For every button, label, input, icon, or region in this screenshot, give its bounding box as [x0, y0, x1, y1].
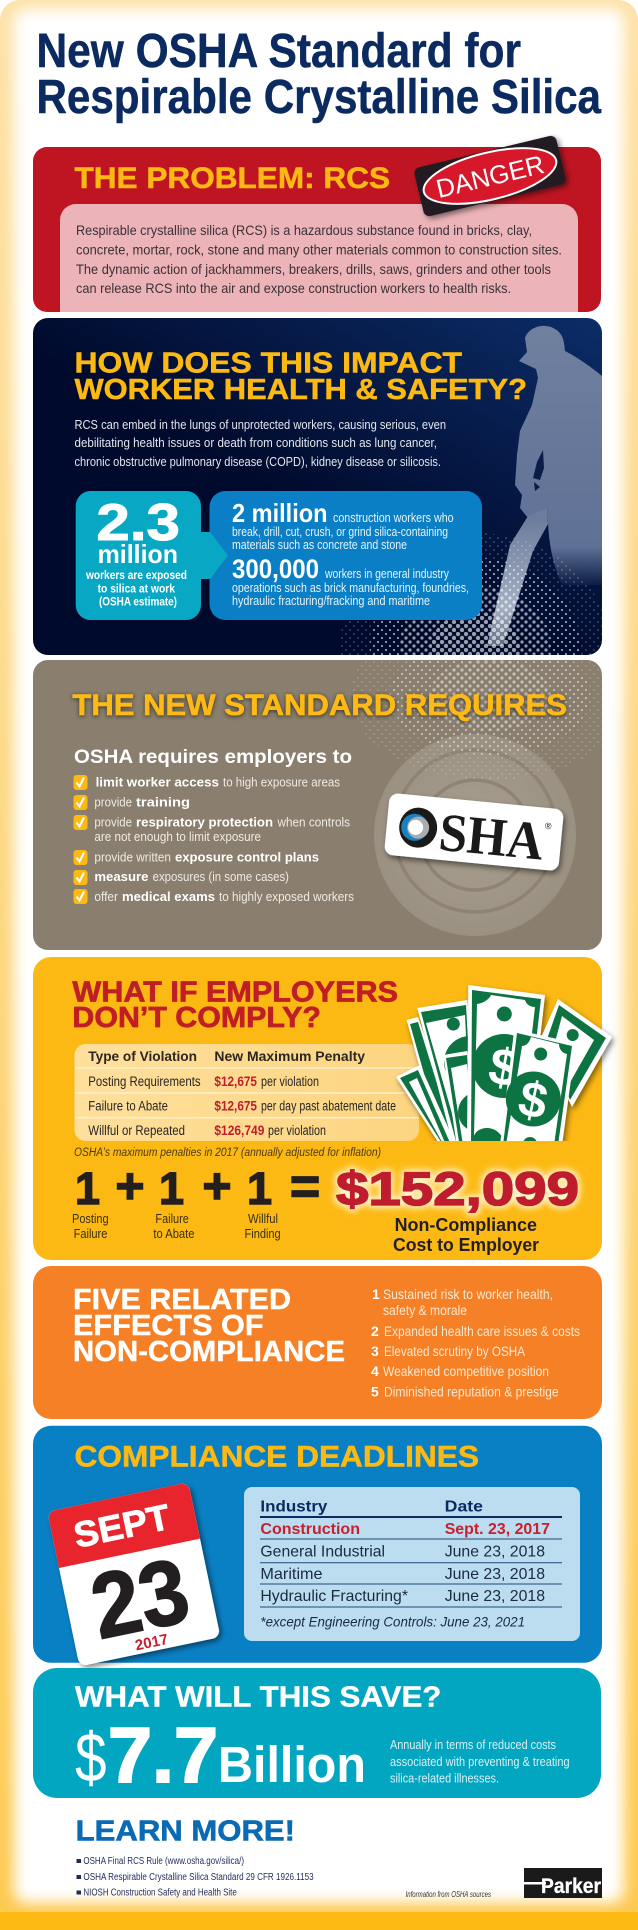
item: respiratory protection — [74, 815, 350, 844]
text block: health effects: chronic obstructive pulmonary disease (COPD), kidney disease or silicosis. — [74, 454, 441, 469]
icon: dollar bills — [396, 985, 612, 1151]
resource links: OSHA Final RCS Rule (www.osha.gov/silica/) — [83, 1856, 244, 1867]
table: penalties: Type of Violation — [88, 1049, 197, 1064]
text block: health effects: RCS can embed in the lungs of unprotected workers, causing serious, even — [74, 417, 446, 432]
numbered list: Sustained risk to worker health, — [383, 1286, 553, 1302]
halftone dots — [341, 534, 602, 655]
text block: savings description — [390, 1738, 570, 1786]
stat box: 2 million construction and 300,000 general industry: hydraulic fracturing/fracking and maritime — [232, 594, 430, 608]
table: penalties: per violation — [261, 1074, 319, 1089]
big figure: $7.7 billion: Billion — [218, 1736, 366, 1793]
panel: what will this save — [33, 1668, 601, 1799]
table: penalties — [74, 1044, 419, 1141]
stat box: 2.3 million workers: 2.3 — [96, 494, 180, 552]
equation labels: Posting — [72, 1211, 109, 1226]
item: medical exams — [74, 889, 354, 904]
item: respiratory protection: provide — [94, 816, 132, 830]
item: limit access — [74, 775, 340, 790]
item: respiratory protection: are not enough to limit exposure — [94, 830, 261, 844]
equation: 1 + 1 + 1 =: 1 — [159, 1163, 184, 1214]
item: exposure control plans: provide written — [94, 851, 171, 865]
logo: Parker: Parker — [541, 1875, 601, 1898]
item: training: provide — [94, 796, 132, 810]
item: measure: measure — [94, 870, 148, 884]
table: penalties: $12,675 — [214, 1074, 257, 1089]
icon: dollar bills: $ — [484, 1037, 523, 1099]
big figure: $7.7 billion: 7.7 — [108, 1711, 218, 1799]
icon: danger badge — [413, 135, 567, 217]
item: training: training — [136, 796, 190, 810]
equation: 1 + 1 + 1 =: 1 — [75, 1163, 100, 1214]
equation: 1 + 1 + 1 =: 1 — [247, 1163, 272, 1214]
equation labels: Finding — [244, 1226, 281, 1241]
text box: problem description: Respirable crystalline silica (RCS) is a hazardous substance found in bricks, clay, — [76, 222, 532, 238]
panel: the problem — [33, 135, 601, 312]
equation: 1 + 1 + 1 =: = — [290, 1158, 320, 1216]
item: respiratory protection: when controls — [277, 816, 350, 830]
heading: comply — [72, 977, 398, 1034]
table: penalties: $12,675 — [214, 1099, 257, 1114]
text block: savings description: silica-related illnesses. — [390, 1772, 499, 1786]
item: exposure control plans: exposure control plans — [175, 851, 319, 865]
equation: 1 + 1 + 1 =: + — [202, 1158, 232, 1214]
stat box: 2 million construction and 300,000 general industry: operations such as brick manufacturing, foundries, — [232, 581, 469, 595]
heading: deadlines: COMPLIANCE DEADLINES — [74, 1441, 479, 1474]
heading: impact — [74, 348, 527, 406]
icon: OSHA logo badge: ® — [544, 821, 552, 831]
heading: five effects: NON-COMPLIANCE — [73, 1336, 345, 1368]
table: penalties: $126,749 — [214, 1123, 264, 1138]
item: medical exams: medical exams — [122, 890, 215, 904]
logo: Parker — [524, 1868, 602, 1898]
item: measure — [74, 870, 289, 885]
panel: worker health and safety — [33, 318, 602, 655]
table: penalties: Failure to Abate — [88, 1099, 168, 1114]
table: deadlines: Hydraulic Fracturing* — [260, 1588, 408, 1605]
text block: savings description: Annually in terms of reduced costs — [390, 1738, 556, 1752]
heading: learn more: LEARN MORE! — [76, 1816, 295, 1848]
table: deadlines: June 23, 2018 — [445, 1566, 545, 1583]
text block: health effects: debilitating health issues or death from conditions such as lung cancer, — [74, 435, 437, 450]
numbered list: 4 — [371, 1363, 379, 1379]
table: deadlines: Sept. 23, 2017 — [445, 1521, 550, 1538]
heading: comply: WHAT IF EMPLOYERS — [72, 977, 398, 1009]
stat box: 2 million construction and 300,000 general industry: 300,000 — [232, 554, 319, 584]
panel: compliance deadlines — [33, 1426, 602, 1666]
numbered list: 1 — [372, 1286, 380, 1302]
table: deadlines — [244, 1487, 580, 1641]
numbered list: Diminished reputation & prestige — [384, 1384, 559, 1400]
total penalty: $152,099: $152,099 — [336, 1162, 579, 1215]
numbered list: Weakened competitive position — [383, 1363, 549, 1379]
stat box: 2 million construction and 300,000 general industry — [210, 491, 482, 620]
resource links: OSHA Respirable Crystalline Silica Standard 29 CFR 1926.1153 — [83, 1872, 314, 1883]
text block: savings description: associated with preventing & treating — [390, 1755, 570, 1769]
big figure: $7.7 billion: $ — [75, 1719, 107, 1797]
table: deadlines: June 23, 2018 — [445, 1588, 545, 1605]
caption: cost to employer — [393, 1215, 539, 1255]
stat box: 2 million construction and 300,000 general industry: materials such as concrete and stone — [232, 538, 407, 552]
halftone dots — [350, 660, 602, 778]
table: deadlines: Maritime — [260, 1566, 323, 1583]
panel: the new standard requires — [33, 660, 602, 950]
heading: five effects: FIVE RELATED — [73, 1284, 291, 1316]
text box: problem description: can release RCS into the air and expose construction workers to health risks. — [76, 280, 511, 296]
item: training — [74, 795, 190, 810]
equation: 1 + 1 + 1 =: + — [115, 1158, 145, 1214]
source note: Information from OSHA sources — [406, 1889, 492, 1899]
item: medical exams: offer — [94, 890, 118, 904]
stat box: 2 million construction and 300,000 general industry: workers in general industry — [324, 567, 450, 581]
resource links — [76, 1856, 314, 1899]
table: penalties: New Maximum Penalty — [214, 1049, 366, 1064]
subheading: requirements: OSHA requires employers to — [74, 747, 352, 768]
item: respiratory protection: respiratory protection — [136, 816, 273, 830]
caption: cost to employer: Cost to Employer — [393, 1235, 539, 1255]
stat box: 2.3 million workers: (OSHA estimate) — [99, 595, 177, 609]
table: penalties: per violation — [268, 1123, 326, 1138]
title: New OSHA Standard for — [36, 25, 521, 78]
heading: five effects: EFFECTS OF — [73, 1310, 264, 1342]
icon: disc with rings — [374, 734, 576, 936]
equation labels: Failure — [155, 1211, 189, 1226]
table: deadlines: Construction — [260, 1521, 360, 1538]
item: limit access: limit worker access — [96, 776, 219, 790]
icon: calendar: 2017 — [134, 1631, 170, 1654]
icon: danger badge: DANGER — [433, 149, 547, 204]
heading: savings: WHAT WILL THIS SAVE? — [75, 1682, 441, 1714]
stat box: 2.3 million workers: workers are exposed — [85, 568, 187, 582]
numbered list: 5 — [371, 1384, 379, 1400]
table: deadlines: *except Engineering Controls: June 23, 2021 — [260, 1614, 525, 1630]
panel: what if employers don't comply — [33, 957, 612, 1260]
caption: cost to employer: Non-Compliance — [395, 1215, 537, 1235]
stat box: 2 million construction and 300,000 general industry: construction workers who — [333, 511, 454, 525]
big figure: $7.7 billion — [75, 1711, 366, 1799]
table: deadlines: Date — [445, 1499, 483, 1516]
stat box: 2 million construction and 300,000 general industry: 2 million — [232, 498, 328, 528]
equation labels: to Abate — [153, 1226, 194, 1241]
heading: new standard: THE NEW STANDARD REQUIRES — [72, 689, 567, 722]
text block: health effects — [74, 417, 446, 469]
table: deadlines: General Industrial — [260, 1544, 385, 1561]
resource links: NIOSH Construction Safety and Health Site — [83, 1888, 237, 1899]
stat box: 2.3 million workers: million — [98, 539, 178, 569]
table: deadlines: Industry — [260, 1499, 327, 1516]
equation: 1 + 1 + 1 = — [75, 1158, 320, 1216]
numbered list: 2 — [371, 1323, 379, 1339]
heading: the problem: THE PROBLEM: RCS — [74, 162, 390, 195]
text box: problem description — [60, 204, 578, 312]
item: medical exams: to highly exposed workers — [219, 890, 354, 904]
numbered list — [371, 1286, 580, 1400]
heading: impact: WORKER HEALTH & SAFETY? — [74, 374, 527, 406]
note: penalties footnote: OSHA’s maximum penalties in 2017 (annually adjusted for inflation) — [74, 1147, 381, 1159]
icon: calendar: 23 — [83, 1539, 197, 1659]
stat box: 2.3 million workers: to silica at work — [98, 582, 175, 596]
equation labels: Failure — [74, 1226, 107, 1241]
heading: five effects — [73, 1284, 345, 1368]
heading: comply: DON’T COMPLY? — [72, 1002, 321, 1034]
numbered list: Expanded health care issues & costs — [384, 1323, 580, 1339]
checklist — [74, 775, 354, 904]
item: measure: exposures (in some cases) — [153, 870, 289, 884]
text box: problem description: The dynamic action of jackhammers, breakers, drills, saws, grinders and other tools — [76, 261, 551, 277]
text box: problem description: concrete, mortar, rock, stone and many other materials common to construction sites. — [76, 242, 562, 258]
numbered list: Elevated scrutiny by OSHA — [384, 1343, 526, 1359]
numbered list: safety & morale — [383, 1302, 467, 1318]
icon: worker silhouette — [487, 326, 602, 646]
stat box: 2 million construction and 300,000 general industry: break, drill, cut, crush, or grind silica-containing — [232, 525, 448, 539]
table: penalties: Posting Requirements — [88, 1074, 201, 1089]
table: penalties: Willful or Repeated — [88, 1123, 185, 1138]
table: penalties: per day past abatement date — [261, 1099, 396, 1114]
item: exposure control plans — [74, 850, 319, 865]
icon: calendar: SEPT — [70, 1496, 173, 1556]
table: deadlines: June 23, 2018 — [445, 1544, 545, 1561]
item: limit access: to high exposure areas — [223, 776, 340, 790]
arrow — [200, 532, 228, 579]
heading: impact: HOW DOES THIS IMPACT — [74, 348, 462, 380]
equation labels — [72, 1211, 281, 1241]
panel: five related effects — [33, 1266, 602, 1419]
numbered list: 3 — [371, 1343, 379, 1359]
stat box: 2.3 million workers — [76, 491, 228, 620]
equation labels: Willful — [248, 1211, 278, 1226]
icon: calendar — [47, 1482, 220, 1666]
icon: dollar bills: $ — [514, 1070, 553, 1130]
title — [36, 25, 601, 124]
